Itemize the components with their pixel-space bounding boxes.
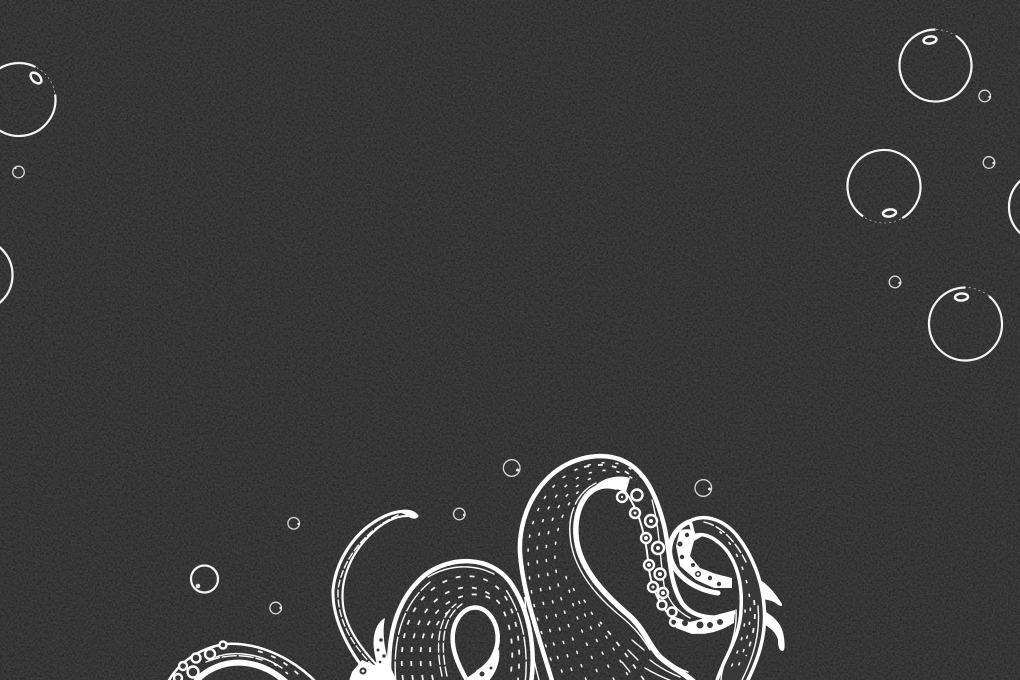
sucker strip: large tentacle	[617, 490, 735, 634]
octopus tentacles	[167, 456, 785, 680]
hole ring: middle coil	[439, 604, 499, 680]
tentacle: far left	[167, 642, 318, 680]
bubble: middle right	[833, 136, 935, 237]
bubble: left edge	[0, 238, 12, 312]
suckers: far left tentacle	[174, 642, 226, 680]
tentacle: large right	[520, 456, 735, 680]
bubble: lower right	[914, 273, 1017, 375]
bubble: lower left medium	[191, 566, 218, 592]
tentacle: thin curved	[333, 510, 418, 680]
bubble: top right	[885, 15, 986, 116]
curl end and suckers	[670, 521, 732, 593]
fins	[757, 578, 785, 651]
tentacle: middle coil	[389, 561, 533, 680]
bubble: top left	[0, 58, 60, 141]
small bubbles	[13, 90, 995, 614]
stippling: large tentacle	[528, 463, 688, 680]
fin and base of thin tentacle	[348, 618, 398, 680]
tentacle: small right curl	[670, 518, 785, 680]
bubble: right edge	[1009, 171, 1020, 243]
